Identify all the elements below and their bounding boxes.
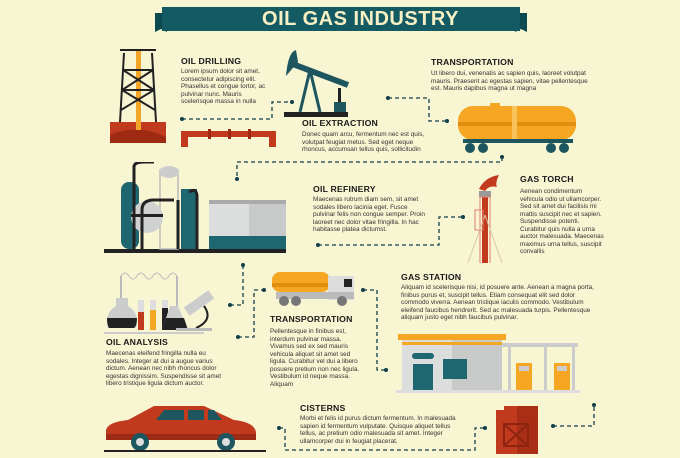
- text: gas station: Aliquam id scelerisque nisi, id posuere ante. Aenean a magna porta, finibus purus et, suscipit tellus. Etiam consequat elit sed dolor commodo viverra. Aenean tristique iaculis commodo. Vestibulum eleifend faucibus hendrerit. Sed ac malesuada turpis. Pellentesque aliquam justo eget nibh faucibus pulvinar.: [401, 284, 594, 321]
- text: oil drilling: Lorem ipsum dolor sit amet, consectetur adipiscing elit. Phasellus et congue tortor, ac pulvinar nunc. Mauris scelerisque massa in nulla: [181, 68, 265, 105]
- icon: refinery: [104, 162, 286, 253]
- icon: pump jack: [284, 50, 349, 117]
- icon: car: [104, 406, 266, 452]
- title banner: [155, 7, 527, 32]
- heading: oil refinery: OIL REFINERY: [313, 184, 376, 194]
- icon: pipe: [181, 129, 276, 147]
- text: oil refinery: Maecenas rutrum diam sem, sit amet sodales libero lacinia eget. Fusce pulvinar felis non congue semper. Proin laoreet nec dolor vitae fringilla. In hac habitasse platea dictumst.: [313, 196, 425, 233]
- icon: tank car: [458, 103, 576, 153]
- icon: tanker truck: [272, 272, 354, 306]
- heading: transportation bottom: TRANSPORTATION: [270, 314, 353, 324]
- heading: gas station: GAS STATION: [401, 272, 461, 282]
- title banner: OIL GAS INDUSTRY: [262, 8, 459, 30]
- text: cisterns: Morbi et felis id purus dictum fermentum. In malesuada sapien id fermentum vulputate. Quisque aliquet tellus tellus, ac pretium odio malesuada sit amet. Integer ullamcorper dui in feugiat placerat.: [300, 415, 456, 444]
- text: transportation top: Ut libero dui, venenatis ac sapien quis, laoreet volutpat mauris. Praesent ac egestas sapien, vitae pellentesque est. Mauris dapibus magna ut magna: [431, 70, 588, 92]
- text: oil analysis: Maecenas eleifend fringilla nulla eu sodales. Integer at dui a augue varius dictum. Aenean nec nibh rhoncus dolor egestas dignissim. Suspendisse sit amet libero tristique ligula dictum auctor.: [106, 350, 221, 387]
- text: gas torch: Aenean condimentum vehicula odio ut ullamcorper. Sed sit amet dui facilisis mi mattis suscipit nec et sapien. Suspendisse potenti. Curabitur quis nulla a urna auctor malesuada. Maecenas maximus urna tellus, suscipit convallis: [520, 188, 604, 255]
- text: oil extraction: Donec quam arcu, fermentum nec est quis, volutpat feugiat metus. Sed eget neque rhoncus, accumsan tellus quis, sollicitudin: [302, 131, 424, 153]
- heading: oil analysis: OIL ANALYSIS: [106, 337, 168, 347]
- heading: gas torch: GAS TORCH: [520, 174, 574, 184]
- heading: transportation top: TRANSPORTATION: [431, 57, 514, 67]
- heading: oil extraction: OIL EXTRACTION: [302, 118, 378, 128]
- icon: gas torch: [468, 175, 502, 263]
- icon: lab equipment: [104, 272, 214, 334]
- text: transportation bottom: Pellentesque in finibus est, interdum pulvinar massa. Vivamus sed ex sed mauris vehicula aliquet sit amet sed ligula. Curabitur vel dui a libero posuere pretium non nec ligula. Vestibulum id neque massa. Aliquam: [270, 328, 359, 388]
- icon: oil derrick: [110, 49, 166, 143]
- heading: cisterns: CISTERNS: [300, 403, 346, 413]
- heading: oil drilling: OIL DRILLING: [181, 56, 241, 66]
- icon: jerrycan: [496, 406, 538, 454]
- icon: gas station: [396, 334, 580, 393]
